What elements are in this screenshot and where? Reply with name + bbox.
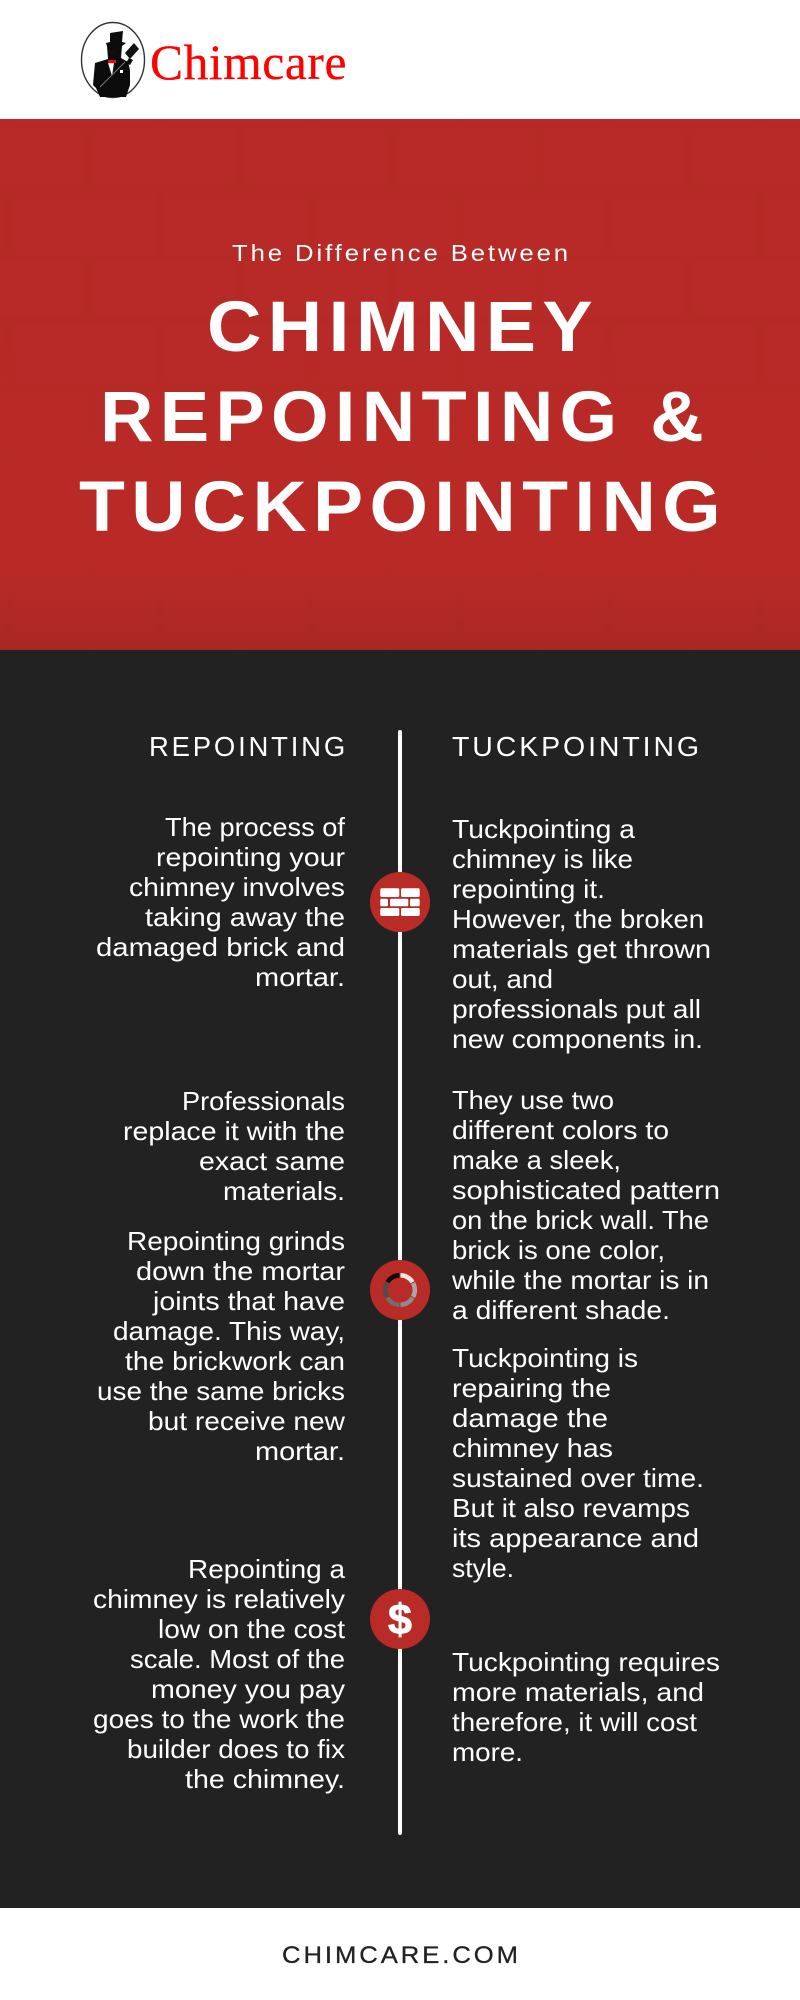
text: repointing process: The process of [165,812,346,842]
panel: dark comparison section [0,650,800,1908]
title: CHIMNEY [207,288,599,367]
text: repointing process: taking away the [145,902,345,932]
text: repointing appearance: Repointing grinds [127,1226,345,1256]
text: repointing cost: chimney is relatively [93,1584,345,1614]
text: repointing process: mortar. [255,962,345,992]
text: tuckpointing appearance: chimney has [452,1433,613,1463]
text: repointing cost: goes to the work the [93,1704,345,1734]
text: tuckpointing colors: different colors to [452,1115,669,1145]
heading: tuckpointing: TUCKPOINTING [452,731,702,762]
logo wordmark: Chimcare [150,34,347,90]
text: repointing process [96,812,346,992]
text: repointing process: chimney involves [129,872,345,902]
text: repointing appearance: down the mortar [136,1256,345,1286]
icon: dollar sign [370,1589,430,1649]
text: tuckpointing colors: brick is one color, [452,1235,665,1265]
text: repointing appearance: mortar. [255,1436,345,1466]
text: repointing appearance: damage. This way, [113,1316,345,1346]
center timeline line [398,730,402,1835]
text: tuckpointing process: professionals put all [452,994,701,1024]
text: repointing cost: money you pay [151,1674,345,1704]
text: tuckpointing appearance: its appearance and [452,1523,699,1553]
text: repointing process: repointing your [156,842,345,872]
text: repointing materials [123,1086,345,1206]
text: repointing materials: replace it with the [123,1116,345,1146]
text: tuckpointing colors [451,1085,720,1325]
text: repointing cost: scale. Most of the [130,1644,345,1674]
text: repointing appearance: use the same bricks [97,1376,345,1406]
text: repointing cost: builder does to fix [127,1734,345,1764]
text: tuckpointing appearance: But it also revamps [452,1493,690,1523]
text: repointing materials: materials. [223,1176,345,1206]
logo: chimney sweep emblem [82,22,347,98]
text: repointing materials: exact same [199,1146,345,1176]
title: TUCKPOINTING [79,468,727,547]
text: tuckpointing cost [452,1647,720,1767]
text: repointing appearance [97,1226,345,1466]
text: tuckpointing process: materials get thrown [452,934,711,964]
text: tuckpointing process: Tuckpointing a [452,814,636,844]
text: tuckpointing colors: on the brick wall. The [452,1205,709,1235]
text: repointing cost: low on the cost [158,1614,346,1644]
text: tuckpointing cost: more. [452,1737,523,1767]
panel: red brick title banner [0,119,800,650]
footer website: CHIMCARE.COM [282,1942,521,1969]
title [79,288,727,547]
text: repointing appearance: but receive new [148,1406,345,1436]
text: tuckpointing process: However, the broken [452,904,704,934]
text: repointing appearance: the brickwork can [125,1346,345,1376]
text: tuckpointing process: out, and [452,964,553,994]
text: tuckpointing appearance: repairing the [452,1373,611,1403]
icon: dollar sign: $ [388,1596,412,1644]
heading: repointing: REPOINTING [149,731,348,762]
text: repointing cost: Repointing a [188,1554,346,1584]
text: tuckpointing cost: therefore, it will cost [452,1707,698,1737]
title: REPOINTING & [100,378,710,457]
text: tuckpointing appearance: Tuckpointing is [452,1343,638,1373]
icon: color ring [370,1260,430,1320]
text: tuckpointing colors: They use two [452,1085,614,1115]
text: tuckpointing colors: a different shade. [452,1295,670,1325]
text: tuckpointing process: new components in. [452,1024,703,1054]
text: tuckpointing colors: while the mortar is in [451,1265,709,1295]
text: tuckpointing cost: more materials, and [452,1677,704,1707]
subtitle: The Difference Between [232,240,571,266]
text: repointing process: damaged brick and [96,932,345,962]
text: tuckpointing process [452,814,711,1054]
text: repointing appearance: joints that have [152,1286,345,1316]
text: tuckpointing colors: make a sleek, [452,1145,621,1175]
footer band [0,1908,800,2000]
text: tuckpointing cost: Tuckpointing requires [452,1647,720,1677]
header: logo band [0,0,800,119]
icon: brick wall [370,872,430,932]
text: tuckpointing appearance: style. [452,1553,514,1583]
text: repointing cost [93,1554,346,1794]
text: tuckpointing process: repointing it. [452,874,605,904]
text: tuckpointing process: chimney is like [452,844,633,874]
text: repointing cost: the chimney. [185,1764,345,1794]
text: repointing materials: Professionals [182,1086,345,1116]
text: tuckpointing appearance: sustained over time. [452,1463,704,1493]
text: tuckpointing appearance [452,1343,704,1583]
text: tuckpointing appearance: damage the [452,1403,608,1433]
text: tuckpointing colors: sophisticated pattern [452,1175,720,1205]
